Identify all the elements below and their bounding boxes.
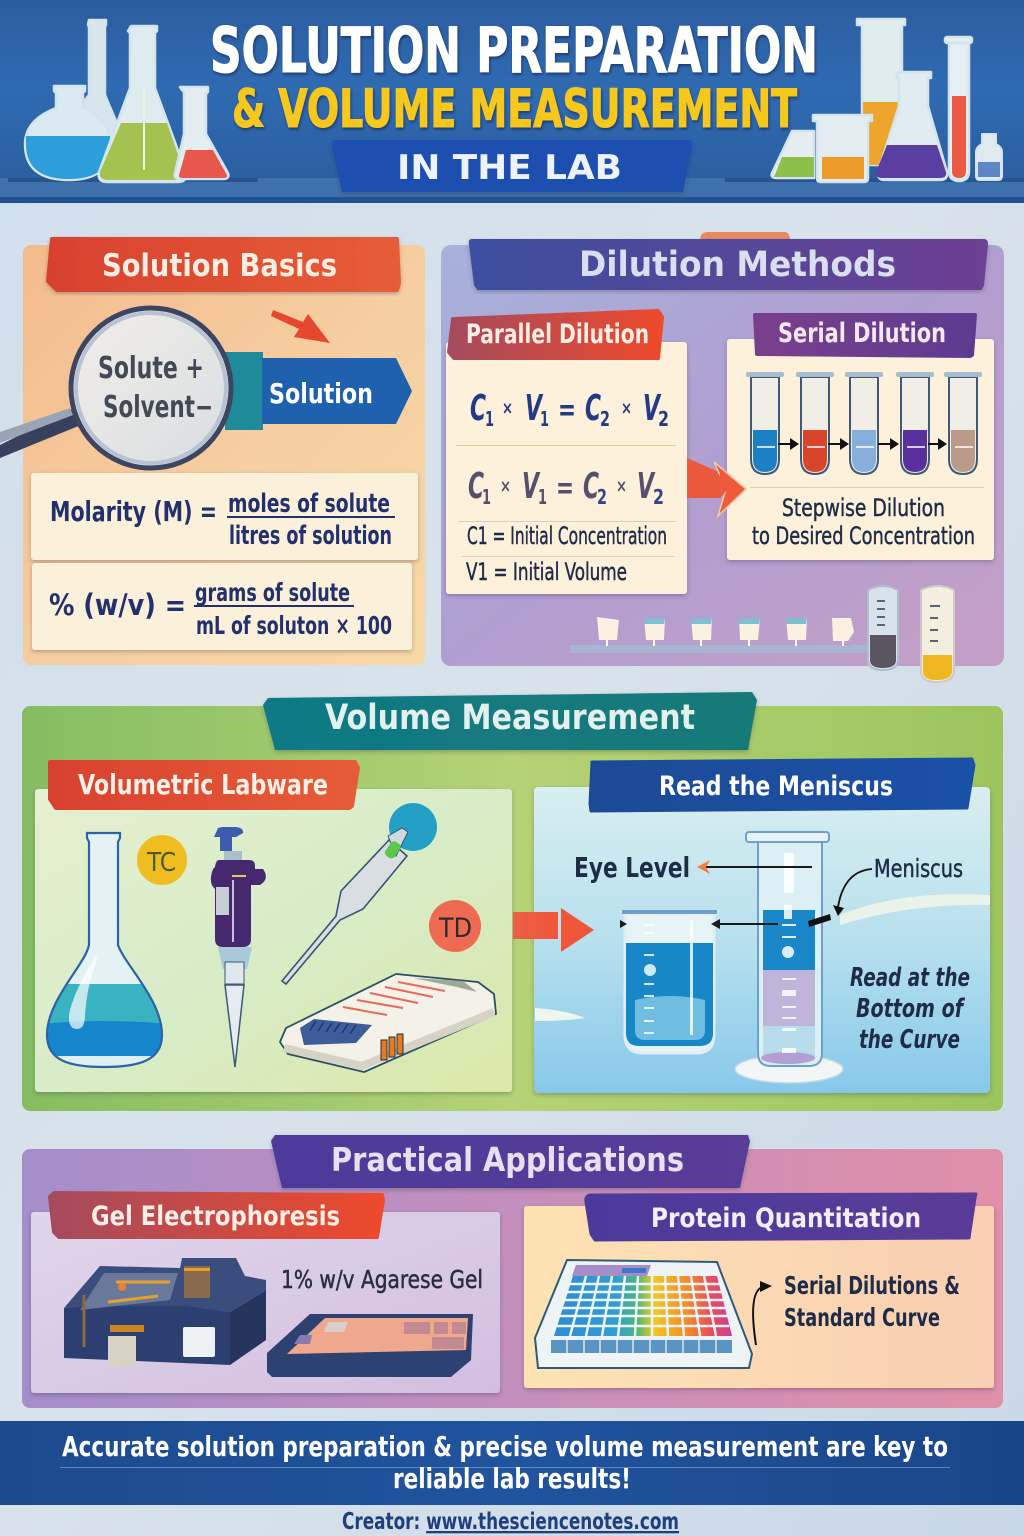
formula 2: 1 (538, 485, 547, 509)
title line 2: & VOLUME MEASUREMENT (232, 79, 797, 140)
formula 2: C (468, 466, 484, 507)
badge: TC: TC (146, 848, 176, 878)
card: volumetric labware (35, 762, 512, 1092)
formula 2: V (522, 466, 541, 507)
heading: dilution methods: Dilution Methods (579, 245, 896, 285)
formula 1: C (585, 388, 601, 429)
panel: dilution methods (441, 232, 1004, 682)
note: read at the bottom: Read at the (850, 963, 970, 993)
subtitle ribbon (332, 140, 692, 192)
big red arrow to meniscus (513, 908, 594, 952)
card: percent formula (32, 563, 412, 650)
heading: read the meniscus (590, 759, 974, 811)
heading: protein quantitation (586, 1194, 976, 1240)
label: meniscus with arrow (808, 854, 963, 927)
icon: red arrow (271, 310, 330, 343)
caption: stepwise dilution: to Desired Concentration (752, 522, 975, 550)
card: molarity formula: litres of solution (229, 521, 392, 551)
formula 2: C (583, 466, 599, 507)
heading: read the meniscus: Read the Meniscus (659, 771, 893, 802)
caption: stepwise dilution: Stepwise Dilution (782, 494, 945, 522)
heading: volumetric labware (50, 762, 358, 808)
label: serial dilutions and standard curve: Serial Dilutions & (784, 1271, 960, 1300)
formula 1: V (525, 388, 544, 429)
heading: serial dilution (755, 315, 975, 356)
icon: volumetric flask (40, 833, 170, 1070)
label: eye level with arrow: Eye Level (574, 851, 690, 884)
label: eye level with arrow (574, 851, 812, 884)
formula 1: V (643, 388, 662, 429)
panel: solution basics (0, 239, 425, 665)
glassware: left group (25, 20, 228, 182)
heading: solution basics: Solution Basics (102, 248, 337, 284)
heading: parallel dilution: Parallel Dilution (466, 319, 649, 350)
card: serial dilution (727, 315, 994, 560)
arrow: beaker to cylinder (620, 919, 778, 929)
definition: V1: V1 = Initial Volume (466, 558, 627, 586)
formula 1: × (621, 398, 632, 419)
formula 1: 2 (658, 407, 669, 431)
heading: gel electrophoresis: Gel Electrophoresis (91, 1201, 340, 1232)
icon: magnifying glass: Solute + (98, 351, 204, 386)
glassware: right group (772, 19, 1002, 182)
card: molarity formula: moles of solute (228, 489, 390, 519)
heading: gel electrophoresis (50, 1193, 383, 1237)
definition: C1: C1 = Initial Concentration (467, 522, 667, 550)
formula 1: = (558, 393, 576, 428)
card: molarity formula (31, 473, 418, 560)
solution arrow label (225, 352, 412, 430)
title line 1: SOLUTION PREPARATION (210, 14, 818, 87)
formula 1: × (502, 398, 513, 419)
label: serial dilutions and standard curve: Standard Curve (784, 1303, 940, 1332)
footer banner (0, 1421, 1024, 1505)
rack of tabs and tubes (570, 586, 954, 682)
arrow: plate to label (753, 1281, 772, 1345)
card: percent formula: grams of solute (195, 578, 350, 607)
formula 1: 2 (600, 407, 610, 431)
heading: volume measurement: Volume Measurement (325, 698, 695, 738)
formula 1: 1 (485, 407, 494, 431)
icon: graduated cylinder (735, 832, 843, 1083)
formula 1: 1 (540, 407, 549, 431)
badge: TD: TD (438, 913, 472, 944)
caption: stepwise dilution (752, 494, 975, 550)
panel: volume measurement (22, 692, 1003, 1111)
heading: volume measurement (263, 692, 757, 750)
formula 1: C (470, 388, 486, 429)
icon: gel plate (267, 1314, 473, 1377)
panel: practical applications (22, 1135, 1003, 1408)
label: serial dilutions and standard curve (784, 1271, 960, 1332)
note: read at the bottom (850, 963, 970, 1055)
icon: gel box (64, 1258, 266, 1366)
heading: volumetric labware: Volumetric Labware (78, 768, 328, 801)
icon: beaker (622, 910, 717, 1053)
heading: solution basics (48, 239, 399, 290)
badge: TD (429, 900, 481, 952)
solution arrow label: Solution (269, 377, 373, 410)
heading: practical applications: Practical Applications (331, 1140, 684, 1179)
icon: plate reader (280, 974, 496, 1072)
formula 2: × (616, 476, 627, 497)
subtitle ribbon: IN THE LAB (397, 148, 622, 188)
footer banner: reliable lab results! (393, 1462, 631, 1495)
formula 2: = (556, 471, 574, 506)
card: read the meniscus (513, 759, 990, 1093)
label: agarose gel: 1% w/v Agarese Gel (281, 1265, 483, 1294)
label: meniscus with arrow: Meniscus (874, 854, 963, 883)
card: gel electrophoresis (31, 1193, 500, 1393)
serial dilution tubes (746, 372, 982, 474)
formula 2: × (500, 476, 511, 497)
card: percent formula: % (w/v) = (49, 588, 186, 622)
badge: TC (137, 835, 187, 885)
heading: practical applications (271, 1135, 750, 1188)
creator credit: Creator: www.thesciencenotes.com (342, 1509, 679, 1535)
heading: parallel dilution (449, 311, 662, 358)
big red arrow (687, 458, 746, 516)
heading: protein quantitation: Protein Quantitation (651, 1203, 921, 1234)
card: protein quantitation (524, 1194, 994, 1388)
formula 2: 1 (482, 485, 491, 509)
icon: electronic pipette (282, 803, 437, 984)
formula 2 (468, 466, 664, 509)
header band (0, 0, 1024, 203)
note: read at the bottom: Bottom of (856, 994, 965, 1024)
heading: dilution methods (470, 240, 987, 289)
icon: magnifying glass (0, 308, 231, 468)
card: percent formula: mL of soluton × 100 (196, 611, 392, 640)
formula 2: 2 (597, 485, 607, 509)
icon: magnifying glass: Solvent− (103, 390, 213, 425)
formula 2: 2 (653, 485, 664, 509)
note: read at the bottom: the Curve (859, 1025, 960, 1055)
card: parallel dilution (446, 311, 687, 594)
icon: micropipette (211, 827, 266, 1067)
icon: 96-well plate (535, 1260, 752, 1368)
heading: serial dilution: Serial Dilution (778, 318, 946, 349)
formula 1 (470, 388, 669, 431)
formula 2: V (637, 466, 656, 507)
card: molarity formula: Molarity (M) = (50, 495, 217, 528)
